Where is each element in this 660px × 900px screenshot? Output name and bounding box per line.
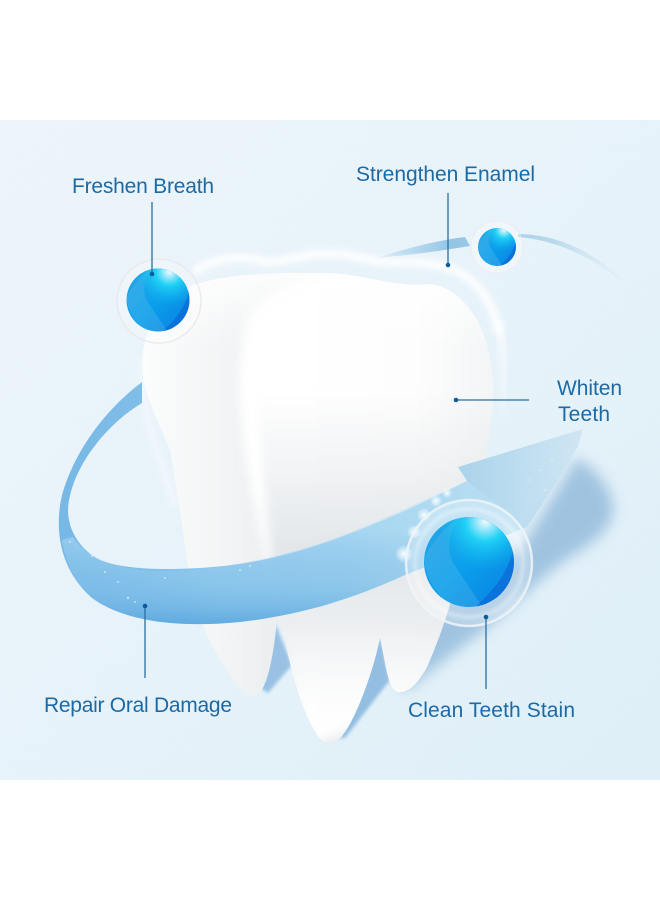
label: Repair Oral Damage [44,604,232,717]
sparkle glow beside large ball [395,488,452,563]
label: Freshen Breath [72,175,214,276]
label: Clean Teeth Stain [408,615,575,722]
ball: freshen breath [117,259,201,343]
infographic: tooth benefits [0,120,660,780]
tooth silhouette [142,273,493,743]
ball: strengthen enamel [471,221,523,273]
ball: clean teeth stain [406,500,532,626]
label: Whiten Teeth: Teeth [558,403,610,426]
tooth front face [239,272,500,750]
background panel [0,120,660,780]
cast shadow: right of tooth [255,458,613,738]
tooth lower shading [264,440,476,662]
orbit ribbon: front arrow band [59,382,583,624]
label: Strengthen Enamel [356,163,535,267]
orbit ribbon: thin back arc [377,234,628,288]
tooth top highlight [208,272,336,303]
label: Clean Teeth Stain: Clean Teeth Stain [408,699,575,722]
label: Freshen Breath: Freshen Breath [72,175,214,198]
ribbon sparkles [69,444,561,603]
label: Whiten Teeth [454,377,622,426]
label: Repair Oral Damage: Repair Oral Damage [44,694,232,717]
tooth [140,254,505,750]
tooth halo fading sides [498,322,505,432]
ribbon shading [62,481,527,624]
tooth halo [197,254,498,330]
label: Whiten Teeth: Whiten [557,377,622,400]
label: Strengthen Enamel: Strengthen Enamel [356,163,535,186]
